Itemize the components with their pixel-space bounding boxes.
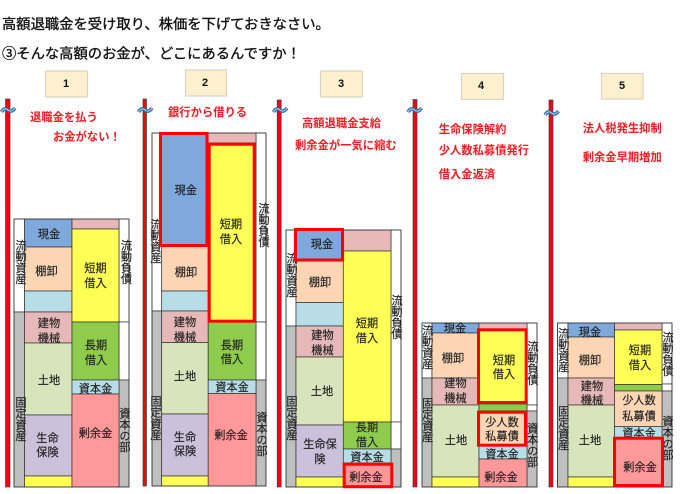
number box 5 (602, 74, 643, 99)
balance sheet 1: 土地 (38, 374, 60, 387)
highlight: surplus (614, 438, 662, 486)
number box 5: 5 (619, 80, 625, 92)
balance sheet 5: 機械 (581, 393, 603, 407)
number box 3: 3 (338, 78, 344, 90)
caption 5: 剰余金早期増加 (583, 150, 662, 164)
balance sheet 2: 機械 (174, 330, 196, 344)
balance sheet 2: 借入 (221, 353, 243, 366)
caption 3: 高額退職金支給 (302, 116, 382, 130)
balance sheet 5: 剰余金 (623, 461, 657, 474)
balance sheet 2: 固定資産 (149, 395, 162, 440)
balance sheet 4: 現金 (444, 322, 466, 335)
caption 4: 生命保険解約 (439, 122, 506, 136)
balance sheet 3: 建物 (311, 328, 334, 342)
balance sheet 3: 長期 (356, 421, 378, 434)
number box 1: 1 (63, 78, 69, 90)
balance sheet 2: 生命 (174, 430, 197, 444)
caption 4: 少人数私募債発行 (439, 143, 529, 157)
balance sheet 1: 生命 (36, 431, 59, 445)
caption 1 (30, 110, 121, 144)
balance sheet 4: 流動負債 (526, 340, 539, 386)
balance sheet 5: 少人数 (622, 393, 656, 407)
panel: step 5 (545, 74, 674, 487)
balance sheet 2: 長期 (221, 339, 243, 352)
balance sheet 1: 建物 (38, 316, 60, 330)
balance sheet 2: 流動資産 (149, 218, 162, 263)
number box 1 (46, 71, 88, 97)
balance sheet 5: 土地 (579, 434, 601, 447)
balance sheet 2 (149, 133, 270, 486)
balance sheet 3: 固定資産 (285, 395, 298, 440)
balance sheet 5: 棚卸 (579, 353, 601, 367)
pole with wave mark 3 (274, 100, 287, 487)
balance sheet 5: 流動資産 (557, 327, 569, 372)
panel: step 1 (2, 71, 132, 487)
title line 1: 高額退職金を受け取り、株価を下げておきなさい。 (2, 16, 330, 33)
balance sheet 2: 短期 (220, 218, 242, 231)
balance sheet 4: 流動資産 (421, 324, 433, 369)
number box 3 (320, 71, 362, 97)
balance sheet 4: 土地 (445, 434, 467, 447)
balance sheet 4: 私募債 (485, 429, 519, 443)
balance sheet 3 (285, 230, 403, 487)
pole with wave mark 2 (138, 99, 152, 486)
balance sheet 4: 機械 (444, 391, 467, 405)
caption 3 (295, 116, 397, 152)
balance sheet 1: 資本の部 (118, 407, 131, 453)
balance sheet 2: 資本金 (215, 380, 249, 394)
highlight: cash (160, 134, 207, 246)
balance sheet 3: 生命保 (303, 437, 337, 451)
number box 2: 2 (202, 77, 208, 89)
balance sheet 3: 短期 (356, 317, 378, 330)
balance sheet 2: 流動負債 (257, 202, 270, 248)
balance sheet 5: 資本金 (622, 426, 656, 440)
balance sheet 5: 借入 (629, 359, 651, 372)
balance sheet 2: 保険 (174, 444, 196, 458)
caption 4: 借入金返済 (439, 167, 496, 181)
panel: step 4 (408, 74, 539, 487)
balance sheet 4 (421, 322, 539, 487)
balance sheet 1: 借入 (84, 277, 107, 290)
balance sheet 5: 固定資産 (557, 405, 569, 450)
balance sheet 4: 建物 (444, 376, 467, 390)
balance sheet 2: 建物 (174, 315, 196, 329)
balance sheet 4: 棚卸 (442, 351, 464, 365)
highlight: short-term loan (478, 330, 526, 402)
balance sheet 3: 借入 (356, 436, 378, 449)
caption 1: お金がない！ (53, 130, 121, 144)
balance sheet 1: 短期 (84, 262, 107, 275)
balance sheet 4: 借入 (493, 368, 515, 381)
caption 3: 剰余金が一気に縮む (295, 138, 397, 152)
balance sheet 3: 流動負債 (390, 294, 403, 340)
caption 5 (583, 121, 662, 164)
balance sheet 1: 棚卸 (35, 264, 58, 278)
balance sheet 1 (14, 219, 132, 487)
caption 1: 退職金を払う (30, 110, 98, 124)
highlight: cash (296, 230, 342, 260)
balance sheet 2: 借入 (220, 233, 242, 246)
balance sheet 3: 資本金 (350, 450, 384, 464)
balance sheet 1: 長期 (85, 339, 107, 352)
balance sheet 2: 現金 (175, 184, 197, 197)
balance sheet 3: 流動資産 (285, 252, 298, 297)
number box 4 (462, 74, 504, 100)
balance sheet 3: 借入 (356, 332, 378, 345)
balance sheet 4: 資本の部 (526, 422, 538, 468)
balance sheet 4: 剰余金 (484, 471, 518, 484)
balance sheet 1: 保険 (36, 445, 59, 459)
panel: step 3 (274, 71, 403, 487)
balance sheet 1: 流動資産 (14, 239, 27, 284)
balance sheet 1: 流動負債 (120, 239, 132, 285)
balance sheet 3: 棚卸 (309, 275, 331, 289)
balance sheet 1: 機械 (38, 331, 60, 345)
balance sheet 1: 剰余金 (79, 427, 112, 440)
balance sheet 1: 資本金 (79, 382, 112, 396)
balance sheet 2: 土地 (174, 370, 196, 383)
balance sheet 3: 機械 (311, 343, 334, 357)
balance sheet 2: 資本の部 (255, 411, 268, 457)
balance sheet 5: 流動負債 (661, 331, 674, 377)
balance sheet 2: 剰余金 (214, 429, 248, 442)
balance sheet 1: 借入 (85, 354, 107, 367)
balance sheet 5 (557, 323, 674, 487)
pole with wave mark 1 (2, 99, 15, 487)
caption 5: 法人税発生抑制 (583, 121, 662, 135)
pole with wave mark 5 (545, 100, 558, 487)
highlight: private bond (478, 412, 526, 445)
balance sheet 4: 資本金 (485, 447, 519, 461)
title line 2: ③そんな高額のお金が、どこにあるんですか！ (2, 46, 301, 62)
highlight: surplus (344, 464, 392, 487)
caption 2: 銀行から借りる (168, 105, 247, 119)
balance sheet 3: 土地 (311, 385, 333, 398)
balance sheet 3: 剰余金 (349, 471, 383, 484)
balance sheet 1: 固定資産 (14, 396, 27, 441)
balance sheet 3: 険 (314, 453, 326, 466)
panel: step 2 (138, 70, 270, 486)
pole with wave mark 4 (408, 100, 422, 487)
balance sheet 4: 少人数 (485, 415, 519, 429)
balance sheet 5: 私募債 (622, 409, 656, 423)
balance sheet 4: 短期 (493, 354, 515, 367)
balance sheet 5: 資本の部 (661, 415, 674, 461)
number box 4: 4 (478, 80, 485, 92)
balance sheet 3: 現金 (311, 238, 333, 251)
balance sheet 4: 固定資産 (421, 397, 433, 442)
number box 2 (186, 70, 226, 96)
balance sheet 5: 建物 (581, 379, 603, 393)
balance sheet 1: 現金 (38, 228, 60, 241)
balance sheet 2: 棚卸 (175, 265, 197, 279)
balance sheet 5: 短期 (629, 344, 651, 357)
balance sheet 5: 現金 (579, 326, 601, 339)
highlight: short-term loan (209, 144, 254, 321)
caption 4 (439, 122, 529, 181)
